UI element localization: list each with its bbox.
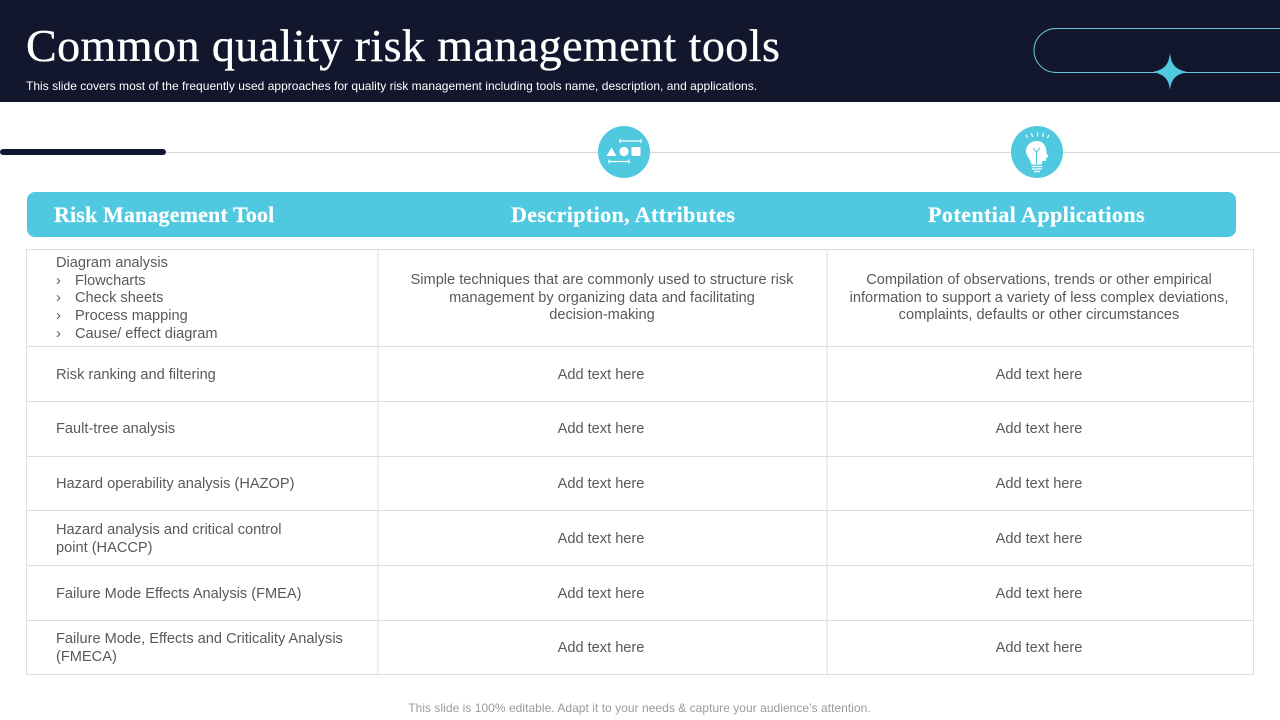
row 3: Fault-tree analysis [56, 420, 175, 436]
text: point (HACCP) [56, 540, 153, 556]
text: Add text here [996, 640, 1082, 656]
header: risk management tool: Risk Management Tool [54, 202, 274, 227]
title: Common quality risk management tools [26, 20, 780, 71]
row 1: application: Compilation of observations, trends or other empirical [866, 272, 1212, 288]
row 7: Failure Mode, Effects and Criticality Analysis [56, 630, 343, 646]
header band [0, 0, 1280, 102]
row 1: description [411, 272, 794, 323]
row 1: diagram analysis: › [56, 308, 61, 324]
table header bar [27, 192, 1236, 237]
row 1: description: Simple techniques that are commonly used to structure risk [411, 272, 793, 288]
row 1: application [850, 272, 1228, 323]
subtitle: This slide covers most of the frequently used approaches for quality risk management including tools name, description, and applications. [26, 79, 757, 93]
text: Add text here [996, 530, 1082, 546]
row 1: application: information to support a variety of less complex deviations, [850, 290, 1228, 306]
text: Add text here [558, 530, 644, 546]
text: Add text here [558, 640, 644, 656]
row 1: diagram analysis: › [56, 326, 61, 342]
row 4: Hazard operability analysis (HAZOP) [56, 476, 294, 492]
decorative outline and star [1034, 28, 1280, 90]
header: description: Description, Attributes [511, 202, 735, 227]
row 1: diagram analysis: Diagram analysis [56, 255, 168, 271]
row 1: diagram analysis: Cause/ effect diagram [75, 326, 218, 342]
row 1: diagram analysis: Flowcharts [75, 273, 146, 289]
text: Add text here [996, 366, 1082, 382]
text: Add text here [558, 586, 644, 602]
icon: shapes [598, 126, 650, 178]
divider line with dark accent [0, 149, 1280, 155]
row 1: diagram analysis: Process mapping [75, 308, 188, 324]
row 1: application: complaints, defaults or other circumstances [899, 307, 1179, 323]
footer note: This slide is 100% editable. Adapt it to your needs & capture your audience’s attention. [408, 701, 871, 715]
row 5: Hazard analysis and critical control [56, 522, 282, 538]
row 6: Failure Mode Effects Analysis (FMEA) [56, 586, 301, 602]
text: Add text here [996, 420, 1082, 436]
row 1: description: decision-making [549, 307, 655, 323]
text: Add text here [558, 476, 644, 492]
row 1: diagram analysis: Check sheets [75, 290, 163, 306]
row 1: diagram analysis [56, 255, 218, 342]
text: Add text here [558, 420, 644, 436]
row 1: description: management by organizing data and facilitating [449, 290, 755, 306]
text: (FMECA) [56, 648, 117, 664]
header: applications: Potential Applications [928, 202, 1145, 227]
text: Add text here [996, 586, 1082, 602]
icon: lightbulb [1011, 126, 1063, 178]
row 1: diagram analysis: › [56, 290, 61, 306]
row 2: Risk ranking and filtering [56, 366, 216, 382]
text: Add text here [558, 366, 644, 382]
row 1: diagram analysis: › [56, 273, 61, 289]
text: Add text here [996, 476, 1082, 492]
